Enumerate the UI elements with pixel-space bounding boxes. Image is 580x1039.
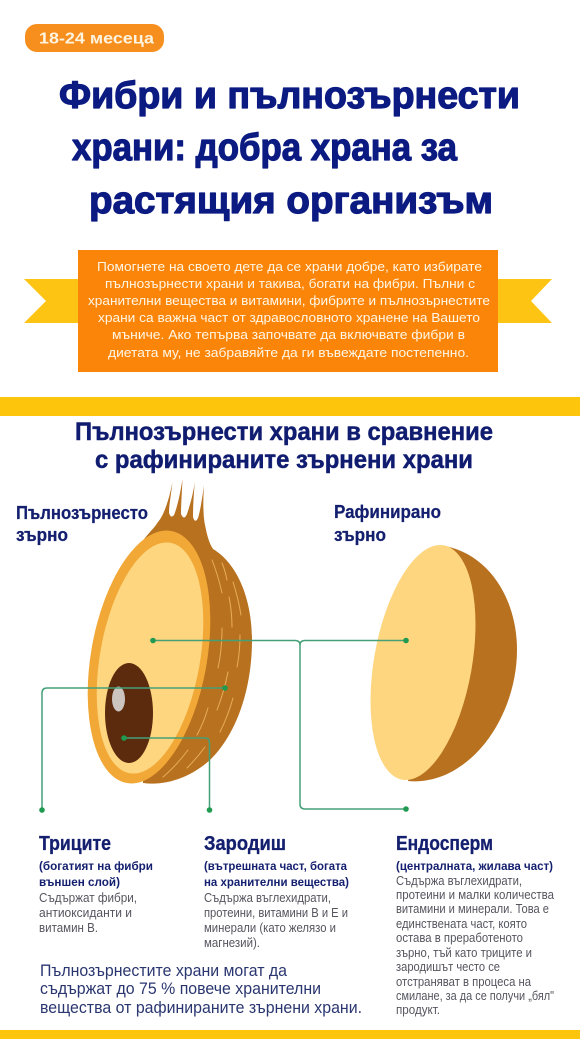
bran streaks <box>163 560 241 777</box>
section heading: Пълнозърнести храни в сравнение <box>75 418 493 446</box>
endosperm body text: единствената част, която <box>396 917 527 931</box>
intro text: диетата му, не забравяйте да ги въвеждате постепенно. <box>108 346 469 360</box>
age badge: 18-24 месеца <box>39 30 154 48</box>
title <box>59 75 520 222</box>
germ body text: Съдържа въглехидрати, <box>204 891 331 905</box>
germ highlight <box>112 686 125 712</box>
endosperm body text: зародишът често се <box>396 960 500 974</box>
bran body text: витамин В. <box>39 921 98 935</box>
bran body text: антиоксиданти и <box>39 906 132 920</box>
endosperm body text: Съдържа въглехидрати, <box>396 874 522 888</box>
bran subtitle: външен слой) <box>39 875 120 889</box>
nutrient comparison statement: съдържат до 75 % повече хранителни <box>40 979 321 998</box>
bran subtitle: (богатият на фибри <box>39 859 153 873</box>
label: whole grain: Пълнозърнесто <box>16 503 148 523</box>
yellow divider bar <box>0 397 580 416</box>
nutrient comparison statement: вещества от рафинираните зърнени храни. <box>40 998 362 1017</box>
bran body text: Съдържат фибри, <box>39 891 137 905</box>
endosperm subtitle: (централната, жилава част) <box>396 859 553 873</box>
endosperm body text: протеини и малки количества <box>396 888 554 902</box>
whole grain illustration <box>70 479 252 793</box>
intro text: Помогнете на своето дете да се храни добре, като избирате <box>97 260 482 274</box>
bran heading: Триците <box>39 833 111 855</box>
refined grain back <box>408 546 517 781</box>
nutrient comparison statement <box>40 961 362 1017</box>
column: germ <box>204 833 349 950</box>
bran outer shell with bristles <box>140 479 252 784</box>
leader line: endosperm <box>150 638 409 812</box>
column: bran <box>39 833 153 935</box>
label: refined grain <box>334 502 441 545</box>
leader line: bran <box>39 685 228 813</box>
germ body text: минерали (като желязо и <box>204 921 336 935</box>
endosperm body text: остава в преработеното <box>396 931 523 945</box>
endosperm body text: отстраняват в процеса на <box>396 975 531 989</box>
germ subtitle: (вътрешната част, богата <box>204 859 347 873</box>
germ body text: магнезий). <box>204 936 260 950</box>
bottom yellow bar <box>0 1030 580 1039</box>
endosperm body text: продукт. <box>396 1003 440 1017</box>
title: растящия организъм <box>89 180 493 222</box>
section heading <box>75 418 493 474</box>
germ <box>105 663 153 763</box>
endosperm body text: смилане, за да се получи „бял" <box>396 989 554 1003</box>
endosperm <box>80 534 220 782</box>
germ subtitle: на хранителни вещества) <box>204 875 349 889</box>
leader line: germ <box>121 735 212 813</box>
germ subtitle <box>204 859 349 889</box>
germ body text: протеини, витамини В и Е и <box>204 906 348 920</box>
refined grain face <box>354 537 492 788</box>
bran subtitle <box>39 859 153 889</box>
endosperm body text: витамини и минерали. Това е <box>396 902 549 916</box>
intro text: мъниче. Ако тепърва започвате да включвате фибри в <box>112 328 465 342</box>
column: endosperm <box>396 833 554 1017</box>
label: whole grain: зърно <box>16 525 68 545</box>
label: refined grain: Рафинирано <box>334 502 441 522</box>
endosperm body text: зърно, тъй като триците и <box>396 946 532 960</box>
intro text: храни са важна част от здравословното хранене на Вашето <box>98 311 480 325</box>
orange panel <box>78 250 498 372</box>
intro text: хранителни вещества и витамини, фибрите и пълнозърнестите <box>88 294 490 308</box>
aleurone ring <box>70 521 228 793</box>
refined grain illustration <box>354 537 517 788</box>
age badge <box>25 24 164 52</box>
section heading: с рафинираните зърнени храни <box>95 446 473 474</box>
label: refined grain: зърно <box>334 525 386 545</box>
germ body text <box>204 891 348 950</box>
intro text: пълнозърнести храни и такива, богати на фибри. Пълни с <box>105 277 475 291</box>
endosperm heading: Ендосперм <box>396 833 493 855</box>
germ heading: Зародиш <box>204 833 286 855</box>
label: whole grain <box>16 503 148 545</box>
intro text <box>88 260 490 360</box>
ribbon tail right <box>496 279 552 323</box>
endosperm body text <box>396 874 554 1017</box>
nutrient comparison statement: Пълнозърнестите храни могат да <box>40 961 288 980</box>
intro ribbon banner <box>24 250 552 372</box>
title: Фибри и пълнозърнести <box>59 75 520 117</box>
title: храни: добра храна за <box>72 127 458 169</box>
bran body text <box>39 891 137 935</box>
ribbon tail left <box>24 279 80 323</box>
